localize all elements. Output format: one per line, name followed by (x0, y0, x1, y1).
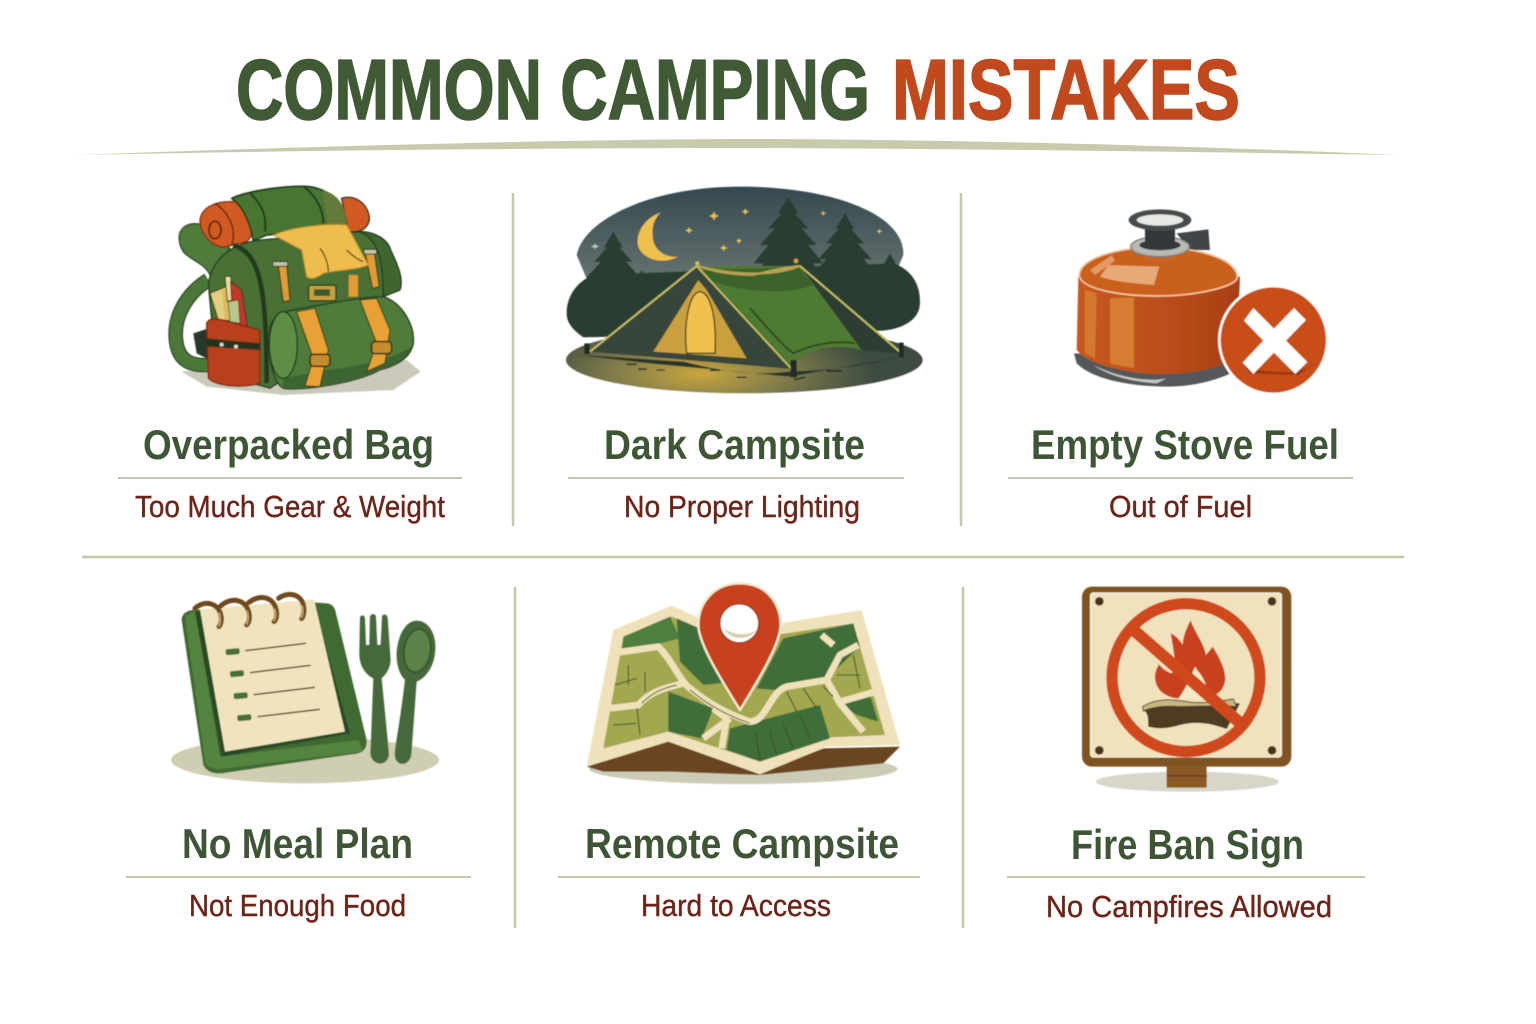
heading: overpacked bag: Overpacked Bag (143, 421, 434, 468)
title: MISTAKES (892, 43, 1240, 138)
panel: fire ban sign (1007, 587, 1365, 924)
subheading: no campfires allowed: No Campfires Allowed (1046, 889, 1332, 924)
subheading: hard to access: Hard to Access (641, 888, 831, 923)
panel: empty stove fuel (1008, 209, 1353, 524)
icon: no fire sign (1082, 587, 1291, 792)
panel: overpacked bag (118, 186, 462, 524)
icon: folded map with pin (587, 583, 900, 784)
icon: tent at night (566, 187, 923, 393)
icon: fuel canister with x (1074, 209, 1327, 394)
heading: remote campsite: Remote Campsite (585, 820, 899, 867)
heading: no meal plan: No Meal Plan (182, 820, 413, 867)
title: COMMON CAMPING (236, 43, 870, 138)
subheading: too much gear: Too Much Gear & Weight (135, 489, 445, 524)
heading: dark campsite: Dark Campsite (604, 421, 865, 468)
panel: no meal plan (126, 594, 471, 923)
panel: remote campsite (558, 583, 920, 923)
subheading: out of fuel: Out of Fuel (1109, 489, 1252, 524)
icon: backpack (176, 186, 421, 395)
subheading: no proper lighting: No Proper Lighting (624, 489, 860, 524)
panel: dark campsite (566, 187, 923, 524)
subheading: not enough food: Not Enough Food (189, 888, 406, 923)
heading: empty stove fuel: Empty Stove Fuel (1031, 421, 1339, 468)
heading: fire ban sign: Fire Ban Sign (1071, 821, 1304, 868)
icon: meal notepad with fork and spoon (171, 594, 439, 783)
